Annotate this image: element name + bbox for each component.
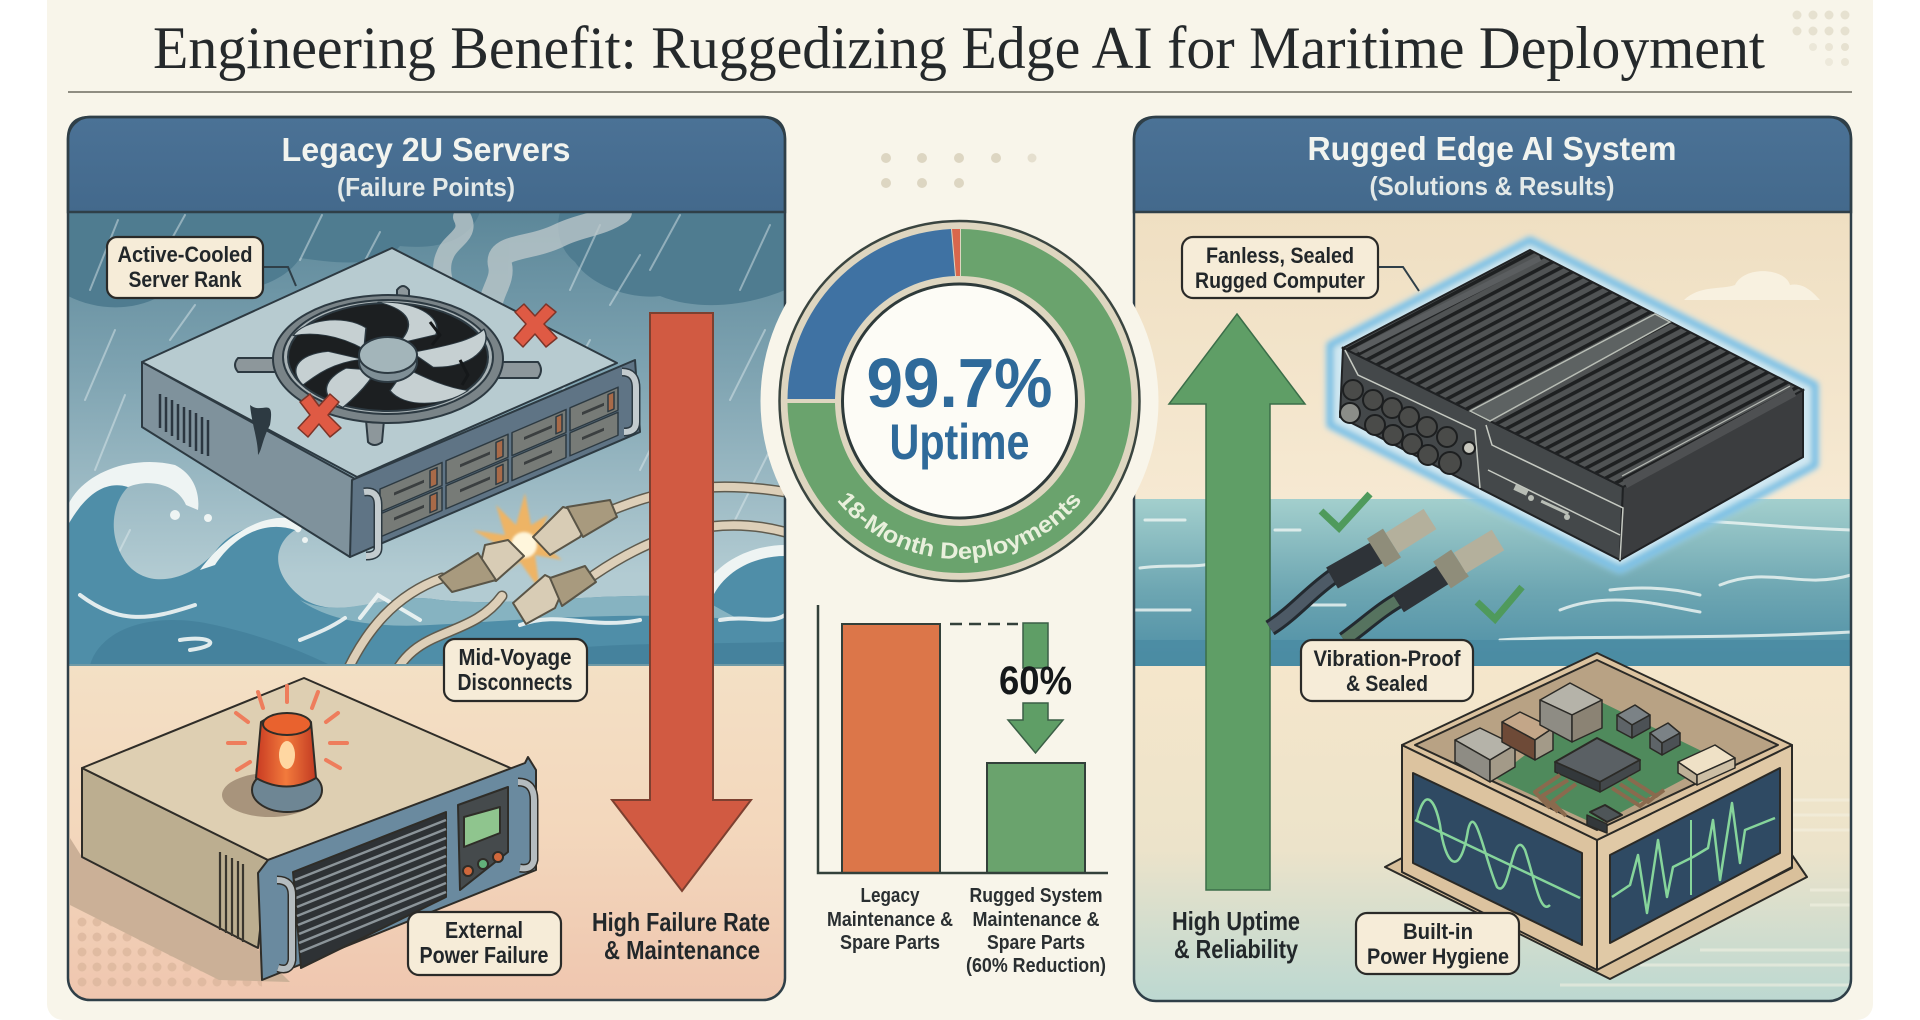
unit buttons [463,866,473,876]
server handles [364,372,636,556]
circuit board [1495,700,1720,825]
panel: rugged edge AI system [1134,117,1851,1001]
label: high uptime and reliability: & Reliability [1174,934,1298,964]
panel header [68,117,785,212]
front plate outlines [1345,350,1623,560]
reduction value: 60% [999,659,1072,703]
lower peach floor [68,665,785,1000]
title: Engineering Benefit: Ruggedizing Edge AI for Maritime Deployment [153,15,1765,81]
connector left [439,540,524,592]
label: built-in power hygiene: Power Hygiene [1367,944,1509,969]
uptime value: 99.7% [866,344,1052,422]
beacon base [252,768,322,812]
lower stripes [1560,800,1851,985]
uptime label: Uptime [890,414,1030,470]
legacy bar label: Maintenance & [827,909,953,931]
unit top face [82,678,515,860]
icon: active-cooled server [142,248,640,557]
first connector [1332,552,1378,578]
label: high uptime and reliability: High Uptime [1172,906,1300,936]
left oscilloscope [1413,773,1582,945]
red X marks [298,304,557,437]
check marks [1321,494,1522,619]
label: mid-voyage disconnects: Mid-Voyage [458,644,572,670]
waves [68,462,785,665]
icon: built-in power hygiene box [1385,653,1807,979]
fan frame [273,295,503,423]
label: active-cooled server rank: Active-Cooled [118,242,252,267]
rugged bar label: Spare Parts [987,932,1085,954]
unit louver [293,812,446,968]
label: high uptime and reliability [1172,906,1300,964]
flange [1385,855,1807,979]
red down arrow [612,313,751,891]
label: external power failure: External [445,917,523,943]
green up arrow [1169,314,1305,890]
fan brackets [235,358,541,378]
icon: sealed M12 cables [1270,494,1522,640]
right face [1620,390,1803,560]
drive bays [380,387,618,537]
server top face [142,248,617,477]
icon: external power unit with beacon [70,678,536,982]
lower sand [1134,666,1851,1001]
connectors [1340,380,1475,474]
box rim [1402,653,1792,840]
finned top [1343,250,1803,487]
green bar [987,763,1085,873]
panel heading: Rugged Edge AI System [1308,130,1676,167]
panel outline [1134,117,1851,1001]
right oscilloscope [1610,768,1780,943]
beacon dome [256,714,316,786]
decorative dots top right [1792,10,1850,66]
panel outline [68,117,785,1000]
label: vibration-proof and sealed: Vibration-Proof [1314,646,1461,671]
label: active-cooled server rank [107,237,296,298]
orange bar [842,624,940,873]
unit display [464,807,500,847]
label: fanless sealed rugged computer: Fanless, Sealed [1206,243,1354,268]
blue glow [1330,240,1815,570]
server front face [350,360,640,557]
second connector [1398,574,1444,603]
top rails [1358,258,1540,350]
panel header [1134,117,1851,212]
label: built-in power hygiene: Built-in [1403,919,1473,944]
label: external power failure [408,912,561,975]
sea [1134,499,1851,666]
beacon rays [228,686,347,770]
chip leads [1535,775,1664,816]
label: external power failure: Power Failure [420,942,548,968]
storm clouds [68,212,785,307]
center decorative dots [881,153,1036,188]
cables [343,487,785,680]
label: vibration-proof and sealed: & Sealed [1346,671,1428,696]
left face [1340,348,1623,560]
donut outer band [780,221,1140,581]
rain [85,215,775,570]
unit control panel [458,787,508,890]
icon: rugged fanless computer [1330,240,1815,570]
panel heading: Legacy 2U Servers [282,131,570,168]
box walls [1402,745,1597,970]
front ports [1513,484,1570,520]
processor chip [1555,738,1640,782]
remaining segment [788,229,955,399]
label: high failure rate: & Maintenance [604,935,760,965]
panel subheading: (Solutions & Results) [1370,171,1614,201]
small chip [1590,805,1622,822]
box interior [1415,660,1778,830]
connector right upper [533,500,617,555]
halftone dots [78,918,262,986]
center seam [1470,314,1670,421]
label: high failure rate [592,907,770,965]
connector right lower [513,566,596,624]
reduction arrow [1008,623,1063,753]
legacy bar label [827,885,953,954]
server left face [142,362,357,557]
label: fanless sealed rugged computer [1182,237,1419,298]
cloud [1684,271,1820,300]
rugged bar label: (60% Reduction) [966,955,1106,977]
unit front panel [258,757,536,980]
floor shadow [70,838,290,982]
fan hub [359,342,417,382]
label: mid-voyage disconnects [444,639,587,701]
bar chart: maintenance comparison [818,605,1108,977]
panel subheading: (Failure Points) [337,172,515,202]
uptime segment [788,229,1131,573]
chassis crack [250,405,271,455]
legacy bar label: Spare Parts [840,932,940,954]
rugged bar label: Rugged System [970,885,1102,907]
storm scene background [69,213,784,608]
failure sliver [952,229,960,276]
label: high failure rate: High Failure Rate [592,907,770,937]
donut center [842,284,1076,518]
panel: legacy 2U servers [68,117,785,1000]
label: active-cooled server rank: Server Rank [128,267,242,292]
sand background [1134,212,1851,500]
legacy bar label: Legacy [860,885,920,907]
donut halo [760,202,1158,600]
unit side vents [220,852,243,942]
label: mid-voyage disconnects: Disconnects [458,669,572,695]
fan blades [293,302,486,407]
unit left face [82,768,268,948]
label: fanless sealed rugged computer: Rugged Computer [1195,268,1365,293]
label: vibration-proof and sealed [1301,640,1473,701]
curved arc label [837,500,1082,559]
smoke [433,213,632,304]
unit handles [277,782,534,969]
rugged bar label [966,885,1106,977]
server vent [160,394,208,456]
axes [818,605,1108,873]
donut chart: uptime: 18-Month Deployments [838,493,1080,564]
icon: cable spark and broken connectors [439,493,617,624]
capacitors [1455,683,1735,785]
donut chart: uptime [760,220,1158,582]
fan blade cracks [430,322,468,385]
label: built-in power hygiene [1356,913,1519,974]
sea streaks [1135,520,1851,640]
rugged bar label: Maintenance & [972,909,1100,931]
beacon shadow [222,773,318,817]
